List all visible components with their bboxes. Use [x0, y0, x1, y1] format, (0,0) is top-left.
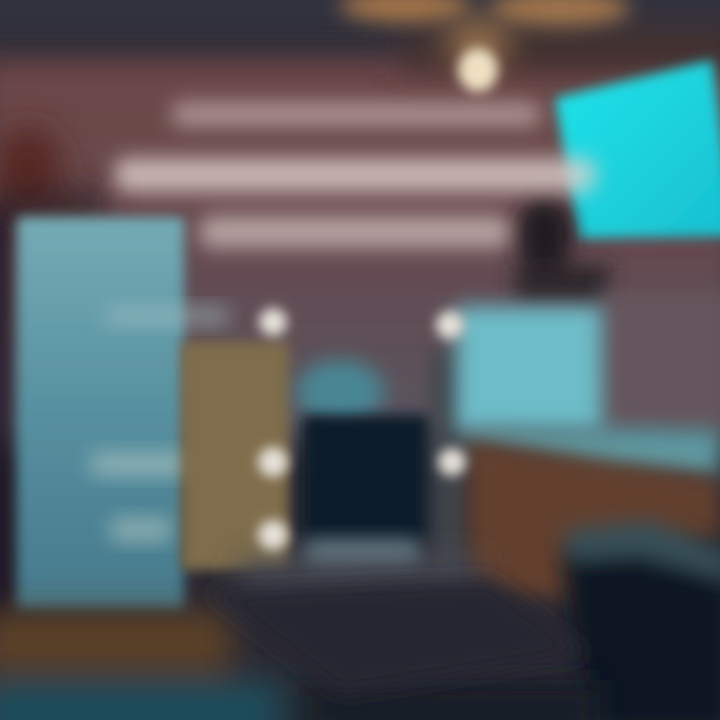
fridge label: [110, 518, 172, 542]
dot: [259, 308, 287, 336]
fridge panel: [17, 217, 230, 610]
ceiling lamp glow: [340, 0, 630, 92]
centre pillar: [432, 350, 466, 590]
title block: [115, 102, 595, 248]
blue mound: [296, 360, 384, 424]
ceiling band: [0, 0, 720, 70]
dark table: [205, 578, 590, 695]
title line 3: [200, 216, 510, 248]
brown lower cabinet: [468, 440, 720, 600]
dark navy box: [302, 415, 432, 545]
left dark shelf: [0, 127, 105, 630]
title line 2: [115, 158, 595, 192]
floor: [0, 560, 600, 720]
gold panel: [181, 342, 289, 570]
dot: [436, 311, 464, 339]
right wall panel: [600, 290, 720, 430]
teal counter: [470, 425, 720, 478]
cyan screen: [555, 60, 720, 238]
dot: [438, 448, 466, 476]
bullet dots: [258, 308, 466, 550]
lower right dark seating: [560, 520, 720, 720]
box base: [305, 540, 420, 570]
fridge label: [105, 306, 230, 326]
title line 1: [172, 102, 540, 126]
dot: [258, 447, 288, 477]
dot: [258, 520, 288, 550]
light blue cabinet: [456, 306, 602, 432]
person silhouette: [515, 197, 610, 303]
fridge label: [90, 452, 230, 476]
